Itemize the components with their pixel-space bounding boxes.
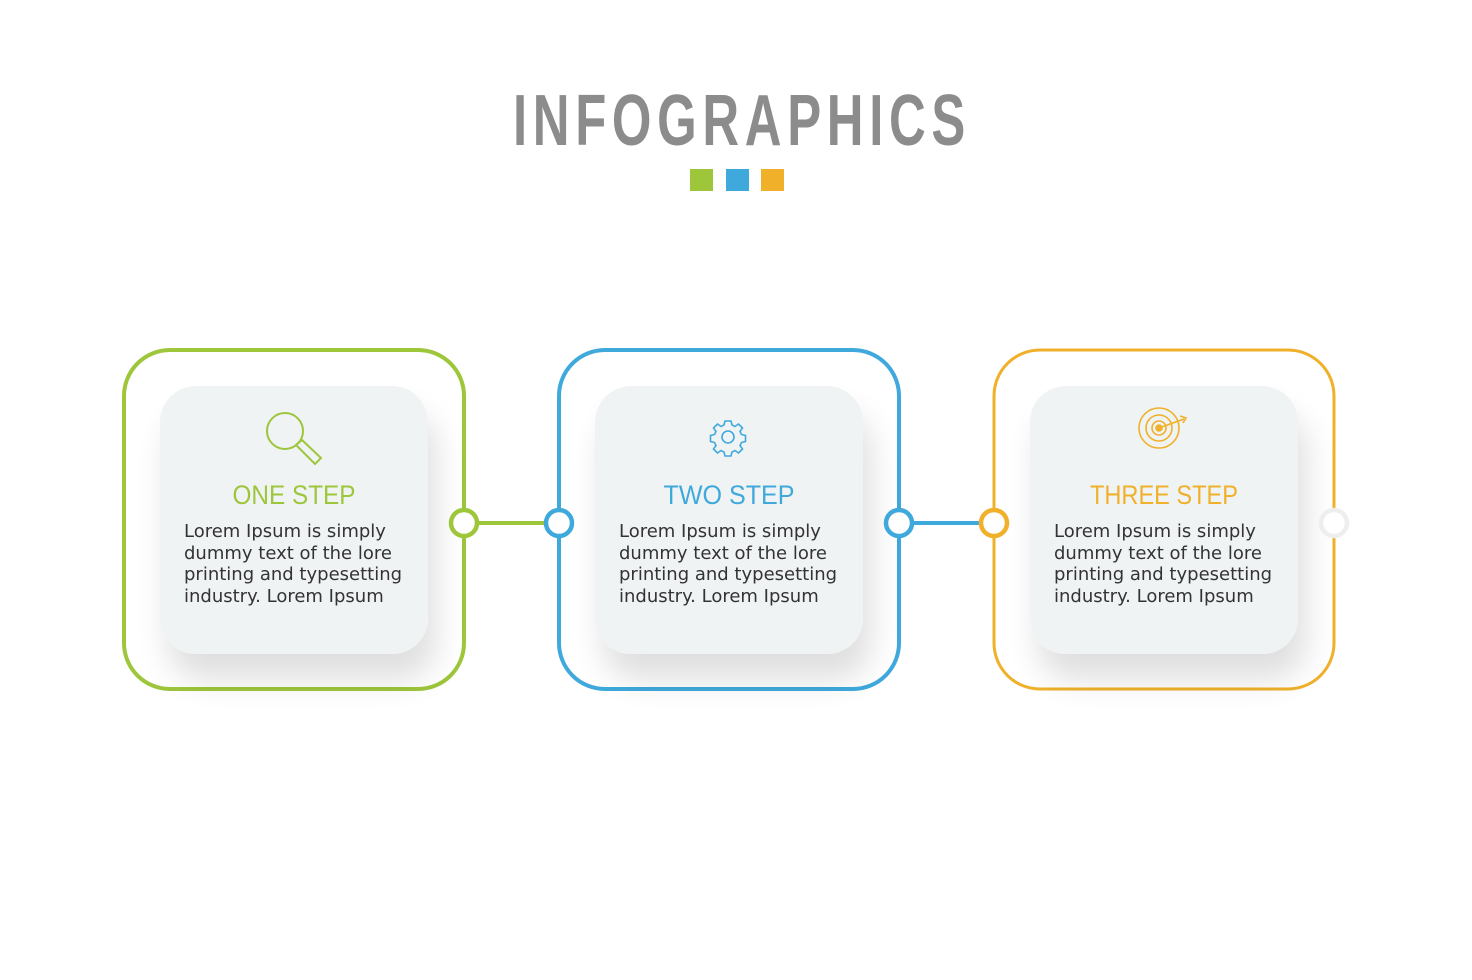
icon: magnifier	[267, 413, 321, 464]
text block: industry. Lorem Ipsum	[184, 586, 384, 607]
icon: target	[1139, 408, 1186, 448]
connector lines	[477, 521, 980, 525]
text block: printing and typesetting	[1054, 564, 1272, 585]
text block: dummy text of the lore	[184, 543, 392, 564]
connector nodes	[451, 510, 1347, 536]
text block: industry. Lorem Ipsum	[1054, 586, 1254, 607]
panel: two step	[559, 350, 899, 689]
text block: Lorem Ipsum is simply	[619, 521, 821, 542]
text block: dummy text of the lore	[1054, 543, 1262, 564]
heading: one step: ONE STEP	[232, 480, 356, 510]
panel: three step	[994, 350, 1334, 689]
text block: industry. Lorem Ipsum	[619, 586, 819, 607]
title: INFOGRAPHICS	[513, 81, 971, 161]
heading: two step: TWO STEP	[664, 480, 794, 510]
text block: Lorem Ipsum is simply	[184, 521, 386, 542]
heading: three step: THREE STEP	[1090, 480, 1238, 510]
panel: one step	[124, 350, 464, 689]
text block: printing and typesetting	[619, 564, 837, 585]
text block: printing and typesetting	[184, 564, 402, 585]
text block: Lorem Ipsum is simply	[1054, 521, 1256, 542]
icon: gear	[710, 421, 746, 456]
text block: dummy text of the lore	[619, 543, 827, 564]
color squares	[690, 169, 784, 191]
